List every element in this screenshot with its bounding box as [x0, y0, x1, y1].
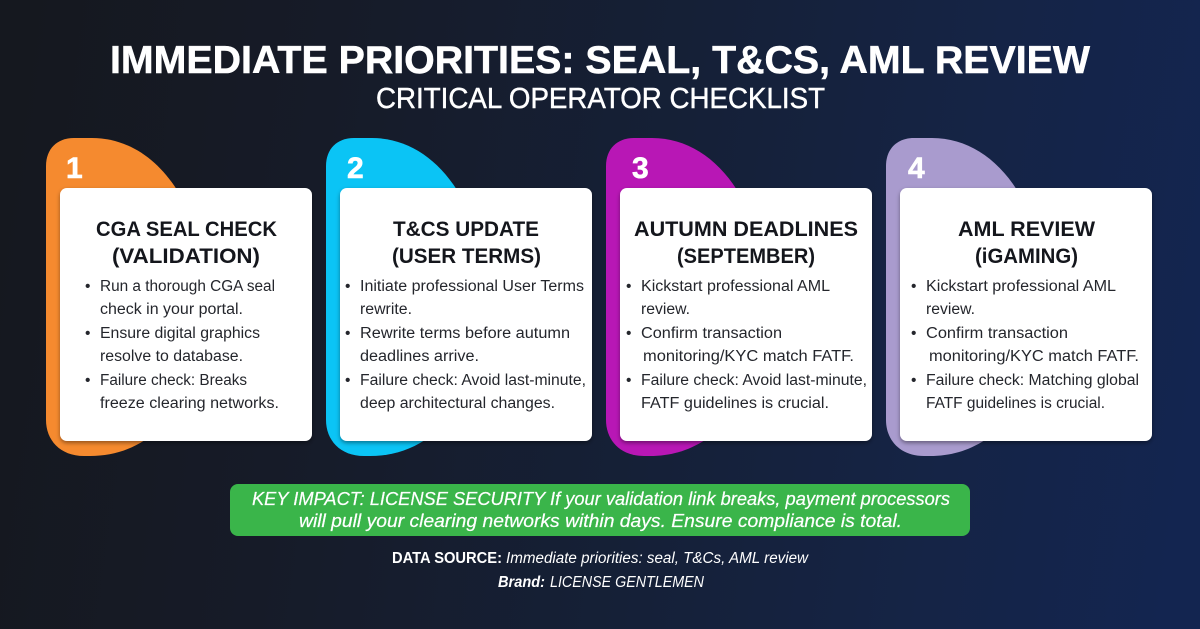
- bullet list: •: [911, 278, 916, 295]
- bullet list: Confirm transaction: [641, 325, 782, 342]
- data source: DATA SOURCE:: [392, 550, 502, 567]
- panel: AML review: [886, 138, 1152, 456]
- callout: key impact: will pull your clearing networks within days. Ensure compliance is total.: [299, 510, 902, 531]
- panel: CGA seal check: [46, 138, 312, 456]
- bullet list: •: [626, 372, 631, 389]
- bullet list: review.: [641, 301, 690, 318]
- data source: Immediate priorities: seal, T&Cs, AML review: [506, 550, 810, 567]
- heading: [96, 218, 277, 268]
- bullet list: Rewrite terms before autumn: [360, 325, 570, 342]
- tab: cyan: [326, 138, 457, 456]
- bullet list: monitoring/KYC match FATF.: [929, 348, 1139, 365]
- panel: autumn deadlines: [606, 138, 872, 456]
- bullet list: check in your portal.: [100, 301, 243, 318]
- bullet list: deep architectural changes.: [360, 395, 555, 412]
- heading: [392, 218, 541, 268]
- bullet list: •: [345, 325, 350, 342]
- brand: Brand:: [498, 574, 545, 591]
- bullet list: Failure check: Matching global: [926, 372, 1139, 389]
- tab: lavender: [886, 138, 1017, 456]
- bullet list: freeze clearing networks.: [100, 395, 279, 412]
- card: [340, 188, 592, 441]
- heading: [634, 218, 858, 268]
- number 3: 3: [632, 152, 649, 185]
- heading: AML REVIEW: [958, 218, 1095, 241]
- bullet list: Confirm transaction: [926, 325, 1068, 342]
- bullet list: Initiate professional User Terms: [360, 278, 584, 295]
- heading: (SEPTEMBER): [677, 245, 815, 268]
- heading: AUTUMN DEADLINES: [634, 218, 858, 241]
- bullet list: Kickstart professional AML: [641, 278, 830, 295]
- bullet list: [85, 278, 279, 412]
- brand: LICENSE GENTLEMEN: [550, 574, 705, 591]
- bullet list: review.: [926, 301, 975, 318]
- bullet list: Failure check: Avoid last-minute,: [360, 372, 586, 389]
- callout: key impact: KEY IMPACT: LICENSE SECURITY If your validation link breaks, payment processors: [252, 488, 950, 509]
- bullet list: rewrite.: [360, 301, 412, 318]
- number 4: 4: [908, 152, 925, 185]
- card: [60, 188, 312, 441]
- bullet list: FATF guidelines is crucial.: [926, 395, 1105, 412]
- bullet list: •: [85, 372, 90, 389]
- heading: (VALIDATION): [112, 245, 260, 268]
- bullet list: Failure check: Breaks: [100, 372, 247, 389]
- heading: T&CS UPDATE: [393, 218, 539, 241]
- bullet list: monitoring/KYC match FATF.: [643, 348, 854, 365]
- bullet list: •: [626, 325, 631, 342]
- number 1: 1: [66, 152, 83, 185]
- heading: [958, 218, 1095, 268]
- bullet list: •: [345, 372, 350, 389]
- number 2: 2: [347, 152, 364, 185]
- bullet list: resolve to database.: [100, 348, 243, 365]
- card: [900, 188, 1152, 441]
- bullet list: Run a thorough CGA seal: [100, 278, 275, 295]
- bullet list: •: [345, 278, 350, 295]
- bullet list: FATF guidelines is crucial.: [641, 395, 829, 412]
- heading: (iGAMING): [975, 245, 1078, 268]
- bullet list: [626, 278, 867, 412]
- bullet list: Kickstart professional AML: [926, 278, 1116, 295]
- tab: orange: [46, 138, 177, 456]
- bullet list: Ensure digital graphics: [100, 325, 260, 342]
- title: IMMEDIATE PRIORITIES: SEAL, T&CS, AML REVIEW: [110, 39, 1090, 82]
- bullet list: deadlines arrive.: [360, 348, 479, 365]
- card: [620, 188, 872, 441]
- heading: CGA SEAL CHECK: [96, 218, 277, 241]
- callout: key impact: [230, 484, 970, 536]
- bullet list: •: [626, 278, 631, 295]
- bullet list: •: [85, 325, 90, 342]
- subtitle: CRITICAL OPERATOR CHECKLIST: [376, 83, 825, 115]
- bullet list: •: [911, 325, 916, 342]
- bullet list: Failure check: Avoid last-minute,: [641, 372, 867, 389]
- bullet list: [345, 278, 586, 412]
- bullet list: •: [85, 278, 90, 295]
- bullet list: [911, 278, 1139, 412]
- tab: magenta: [606, 138, 737, 456]
- bullet list: •: [911, 372, 916, 389]
- heading: (USER TERMS): [392, 245, 541, 268]
- panel: T&CS update: [326, 138, 592, 456]
